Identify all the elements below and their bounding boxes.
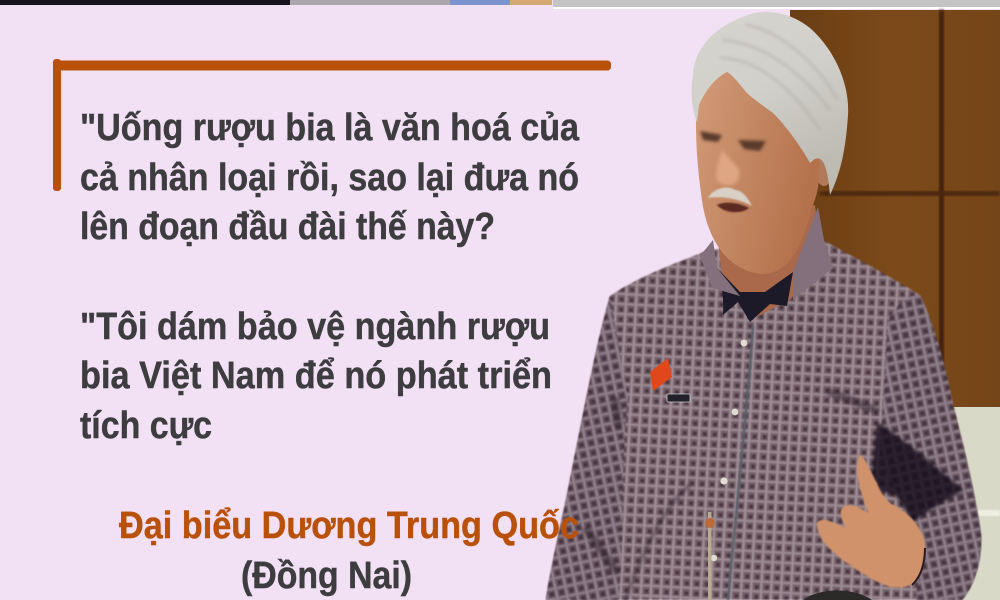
quote one: lên đoạn đầu đài thế này? [80,206,495,248]
lapel badge [650,358,672,391]
arm shadow [870,422,963,522]
speaker province: (Đồng Nai) [241,555,412,597]
ear [813,134,835,186]
top cropped photo strip [0,0,1000,9]
sleeve: left arm [546,296,628,600]
microphone [705,512,715,600]
pen in pocket [667,394,690,402]
portrait: speaker [546,12,981,600]
nose [716,150,739,185]
shirt folds [587,392,875,600]
collar flaps [700,207,833,300]
quote two [80,306,552,447]
moustache [708,188,752,206]
hair strands [720,24,838,130]
shirt buttons [711,340,747,561]
quote one: "Uống rượu bia là văn hoá của [80,107,580,149]
photo background: wood wall [790,10,1000,600]
shirt body [546,240,981,600]
neck [716,205,822,320]
quote one [80,107,580,248]
quote two: "Tôi dám bảo vệ ngành rượu [80,306,550,348]
sleeve: right arm [880,295,981,600]
cuff edge [912,548,925,585]
face [696,60,819,274]
hair [692,12,848,195]
hand [817,455,925,588]
collar [717,268,793,322]
dark head at lower edge [803,591,872,600]
placket [728,325,753,600]
accent bracket [53,59,611,191]
quote one: cả nhân loại rồi, sao lại đưa nó [80,157,579,199]
quote two: bia Việt Nam để nó phát triển [80,355,552,397]
mouth [717,203,749,212]
quote two: tích cực [80,405,212,447]
speaker name: Đại biểu Dương Trung Quốc [119,505,579,547]
eyes and brows [700,131,766,151]
